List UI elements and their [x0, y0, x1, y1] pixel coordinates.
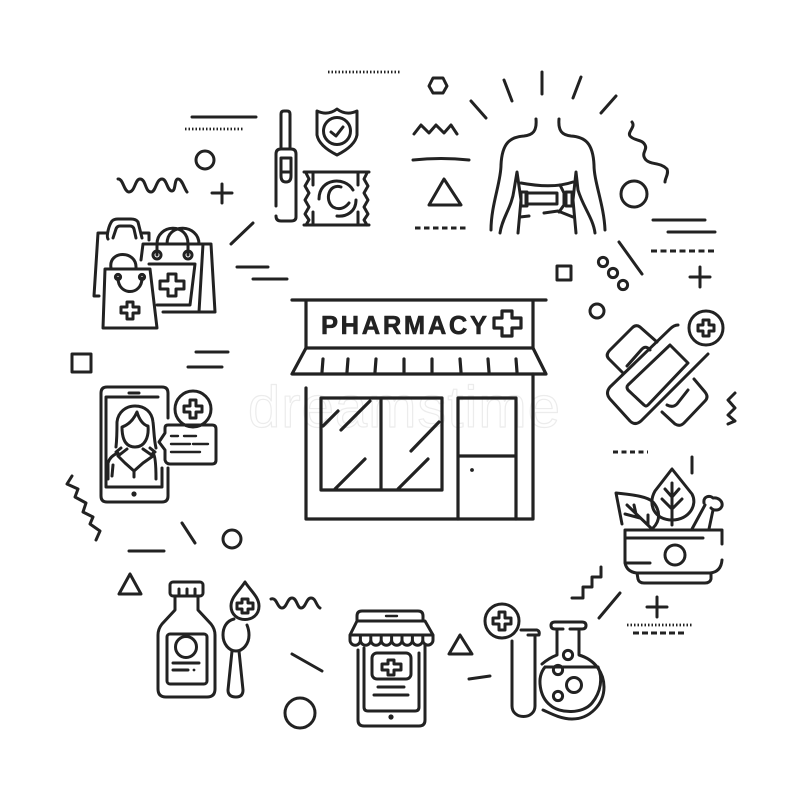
icon: shopping bags — [94, 219, 215, 328]
pharmacy sign text: PHARMACY — [321, 312, 487, 340]
icon: torso with back brace — [491, 119, 605, 233]
speech bubble — [159, 425, 216, 464]
sign cross — [494, 311, 521, 336]
plus badge on flask — [485, 604, 519, 638]
decorative shapes bottom — [67, 354, 490, 728]
plus badge on phone — [175, 391, 211, 427]
icon: bandages — [607, 325, 708, 425]
icon: phone storefront — [350, 611, 433, 726]
icon: flask and test tube — [485, 604, 604, 719]
icon: mortar with herbs — [616, 469, 722, 583]
watermark: dreamstime — [248, 375, 560, 440]
pharmacy storefront — [292, 300, 546, 519]
icon: sealed packet — [304, 172, 369, 225]
icon: spoon with drop — [223, 582, 259, 697]
icon: medicine bottle — [158, 582, 215, 697]
shop door — [458, 398, 516, 519]
doctor portrait — [108, 406, 156, 479]
sun rays — [471, 72, 616, 118]
shop wall — [306, 374, 533, 519]
decorative shapes right — [572, 393, 735, 633]
icon: thermometer — [276, 111, 296, 221]
shop window — [321, 398, 442, 490]
icon: doctor on phone — [101, 387, 216, 502]
awning — [292, 348, 546, 374]
icon: shield — [317, 109, 357, 155]
icon: plus badge on bandage — [689, 311, 723, 345]
decorative shapes top — [118, 72, 717, 367]
